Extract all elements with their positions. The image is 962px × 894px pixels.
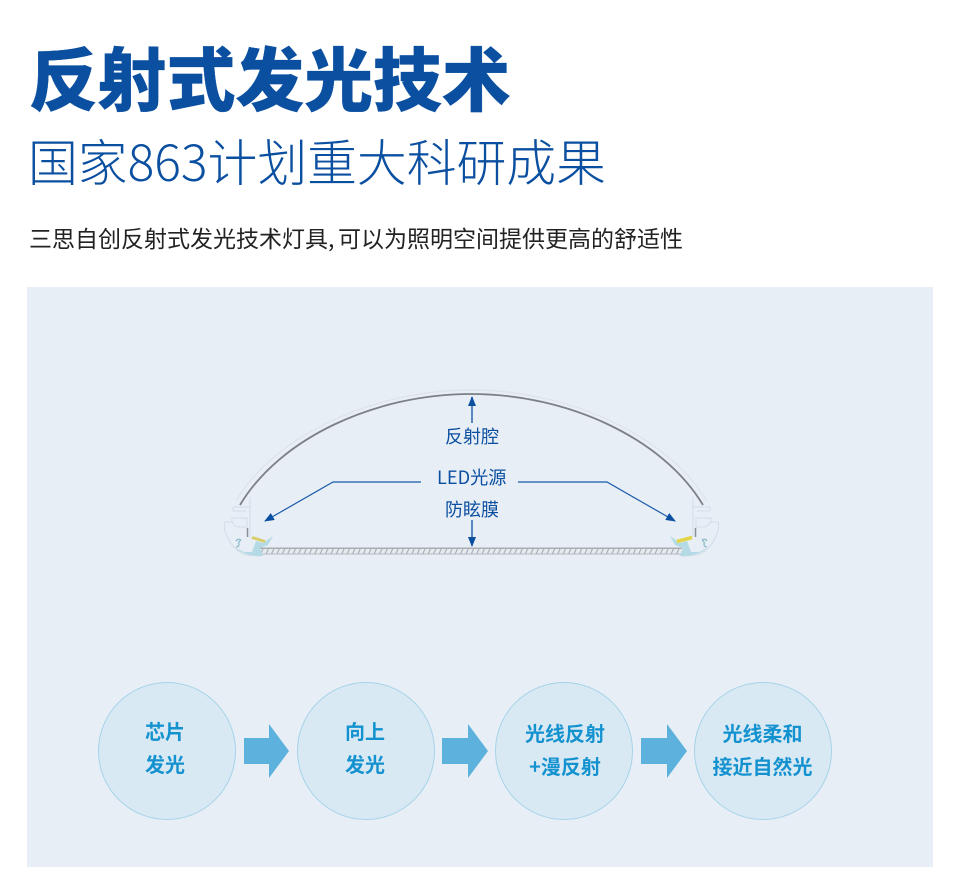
circle: reflection (495, 682, 633, 820)
text: chip: 发光 (145, 749, 185, 778)
anti-glare film (260, 548, 682, 554)
label: film: 防眩膜 (445, 496, 499, 522)
text: natural light (712, 718, 812, 780)
title: 反射式发光技术 (29, 25, 511, 125)
intro text: 三思自创反射式发光技术灯具 可以为照明空间提供更高的舒适性 (29, 220, 683, 254)
text: reflection: +漫反射 (529, 751, 601, 780)
arrow: to reflector (471, 397, 473, 423)
label: reflector: 反射腔 (445, 423, 499, 449)
text: natural light: 接近自然光 (712, 751, 812, 780)
right end bracket (670, 497, 719, 556)
circle: natural light (694, 682, 832, 820)
left end bracket (224, 497, 273, 556)
text: upward: 发光 (345, 749, 385, 778)
label: LED: LED光源 (437, 464, 506, 490)
arrow: to film (471, 520, 473, 546)
text: upward (345, 716, 385, 778)
text: upward: 向上 (345, 716, 385, 745)
circle: chip (98, 682, 236, 820)
text: reflection (525, 718, 605, 780)
text: reflection: 光线反射 (525, 718, 605, 747)
circle: upward (297, 682, 435, 820)
text: chip: 芯片 (145, 716, 185, 745)
text: chip (145, 716, 185, 778)
panel: background (27, 287, 933, 867)
arrow: to right LED (518, 482, 675, 521)
reflector dome (236, 390, 707, 505)
intro text: , (328, 220, 334, 254)
subtitle: 国家863计划重大科研成果 (28, 124, 606, 196)
arrow: to left LED (265, 482, 421, 521)
text: natural light: 光线柔和 (722, 718, 802, 747)
